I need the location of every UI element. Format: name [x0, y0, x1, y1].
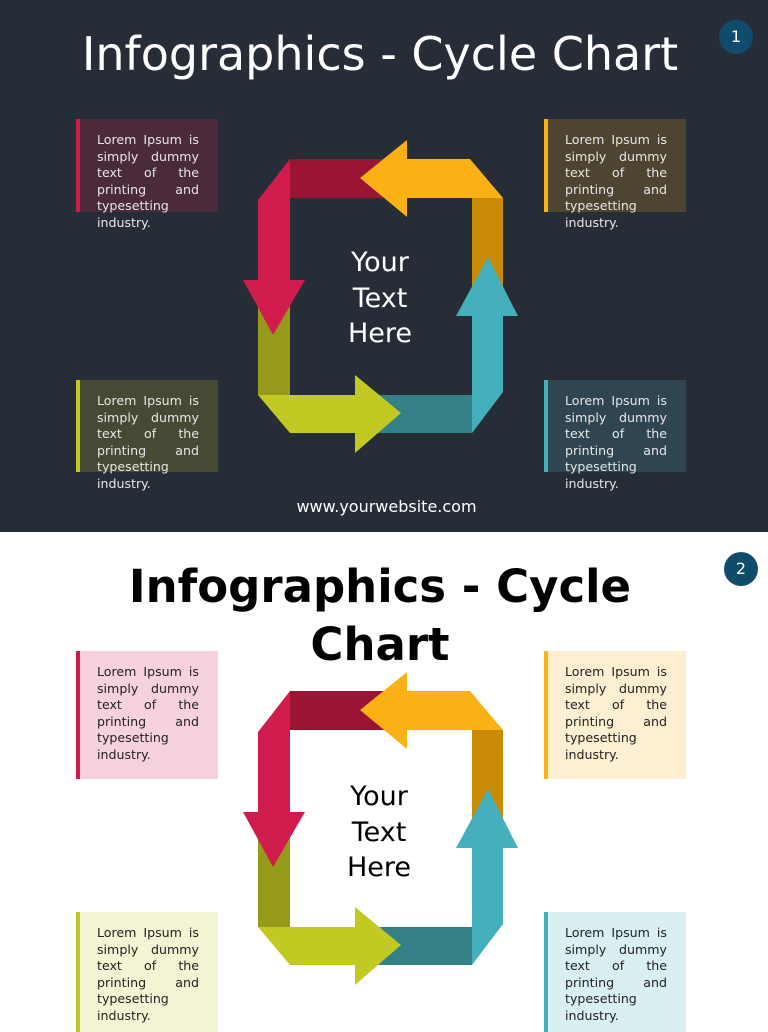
text box bottom-left: Lorem Ipsum is simply dummy text of the printing and typesetting industry. — [97, 393, 199, 490]
panel: dark slide — [0, 0, 768, 532]
center text: Your — [350, 781, 408, 812]
badge 1: 1 — [731, 27, 741, 46]
cycle chart light — [243, 672, 518, 985]
text box top-left — [76, 119, 218, 212]
center text — [348, 247, 412, 349]
cycle chart dark — [243, 140, 518, 453]
text box bottom-left — [76, 380, 218, 472]
text box bottom-left: Lorem Ipsum is simply dummy text of the printing and typesetting industry. — [97, 925, 199, 1022]
title: Infographics - Cycle Chart — [129, 560, 631, 671]
text box bottom-right: Lorem Ipsum is simply dummy text of the printing and typesetting industry. — [565, 393, 667, 490]
text box bottom-right — [544, 380, 686, 472]
center text: Text — [352, 816, 406, 848]
badge 2 — [724, 552, 758, 586]
center text — [347, 781, 411, 883]
text box top-right: Lorem Ipsum is simply dummy text of the printing and typesetting industry. — [565, 664, 667, 762]
center text: Here — [347, 852, 411, 883]
text box top-right — [544, 119, 686, 212]
text box top-left: Lorem Ipsum is simply dummy text of the printing and typesetting industry. — [97, 132, 199, 230]
text box bottom-left — [76, 912, 218, 1032]
text box top-left: Lorem Ipsum is simply dummy text of the printing and typesetting industry. — [97, 664, 199, 762]
center text: Text — [353, 282, 407, 314]
text box top-right: Lorem Ipsum is simply dummy text of the printing and typesetting industry. — [565, 132, 667, 230]
center text: Your — [351, 247, 409, 278]
badge 2: 2 — [736, 559, 746, 578]
badge 1 — [719, 20, 753, 54]
panel: light slide — [0, 532, 768, 1024]
footer url: www.yourwebsite.com — [296, 497, 477, 516]
text box top-left — [76, 651, 218, 779]
text box top-right — [544, 651, 686, 779]
text box bottom-right — [544, 912, 686, 1032]
title: Infographics - Cycle Chart — [82, 27, 678, 81]
text box bottom-right: Lorem Ipsum is simply dummy text of the printing and typesetting industry. — [565, 925, 667, 1022]
center text: Here — [348, 318, 412, 349]
